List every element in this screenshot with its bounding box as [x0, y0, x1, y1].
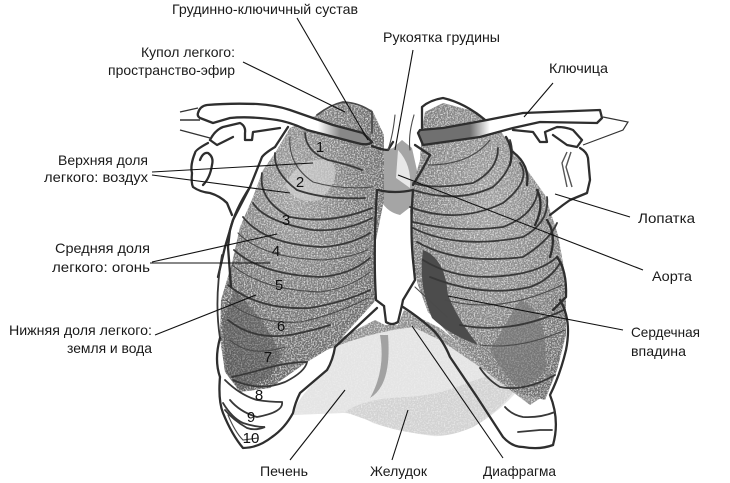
- label: stomach: Желудок: [370, 463, 428, 479]
- right-side lung (viewer's left): [220, 102, 384, 392]
- rib numbers: 3: [282, 212, 290, 229]
- left rib cage outline and costal arch: [403, 137, 568, 448]
- label: cardiac notch second line: впадина: [631, 343, 686, 359]
- mediastinum gray: aorta region: [378, 140, 418, 215]
- diaphragm band: [327, 310, 545, 405]
- rib numbers: 4: [272, 243, 280, 260]
- right scapula: [180, 108, 280, 215]
- label: cardiac notch: Сердечная: [631, 324, 700, 340]
- right rib cage outline: [217, 127, 377, 448]
- label: scapula: Лопатка: [638, 210, 695, 226]
- label: diaphragm: Диафрагма: [483, 463, 556, 479]
- rib numbers: 5: [275, 277, 283, 294]
- label: lung dome second line: пространство-эфир: [108, 62, 235, 78]
- rib numbers: 7: [264, 349, 272, 366]
- rib numbers: 10: [243, 430, 259, 447]
- rib numbers: 8: [255, 387, 263, 404]
- label: middle lobe second line: легкого: огонь: [52, 259, 150, 275]
- rib numbers: 9: [247, 409, 255, 426]
- label: aorta: Аорта: [652, 268, 692, 284]
- left clavicle: [418, 110, 602, 145]
- rib numbers: [243, 139, 324, 447]
- label: upper lobe: Верхняя доля: [58, 152, 148, 168]
- label: upper lobe second line: легкого: воздух: [44, 169, 148, 185]
- rib numbers: 1: [316, 139, 324, 156]
- label: lung dome: Купол легкого:: [141, 44, 235, 60]
- label: lower lobe: Нижняя доля легкого:: [9, 322, 152, 338]
- label: liver: Печень: [260, 463, 308, 479]
- left scapula: [513, 117, 628, 215]
- label: manubrium: Рукоятка грудины: [383, 29, 500, 45]
- label: sternoclavicular joint: Грудинно-ключичный сустав: [172, 1, 358, 17]
- label: middle lobe: Средняя доля: [55, 240, 150, 256]
- rib lines, left lung: [226, 133, 373, 351]
- left lung dome outline: [422, 98, 485, 128]
- leader lines: [150, 18, 643, 460]
- abdomen: liver and stomach: [293, 325, 520, 436]
- left-side lung (viewer's right): [410, 103, 566, 400]
- sternum and mediastinum borders: [372, 115, 447, 324]
- label: lower lobe second line: земля и вода: [67, 340, 152, 356]
- label: clavicle: Ключица: [549, 60, 608, 76]
- rib numbers: 2: [296, 174, 304, 191]
- lung dome outline, right lung: [317, 102, 372, 133]
- right clavicle: [198, 104, 372, 144]
- rib lines, right lung: [410, 140, 565, 346]
- rib numbers: 6: [277, 318, 285, 335]
